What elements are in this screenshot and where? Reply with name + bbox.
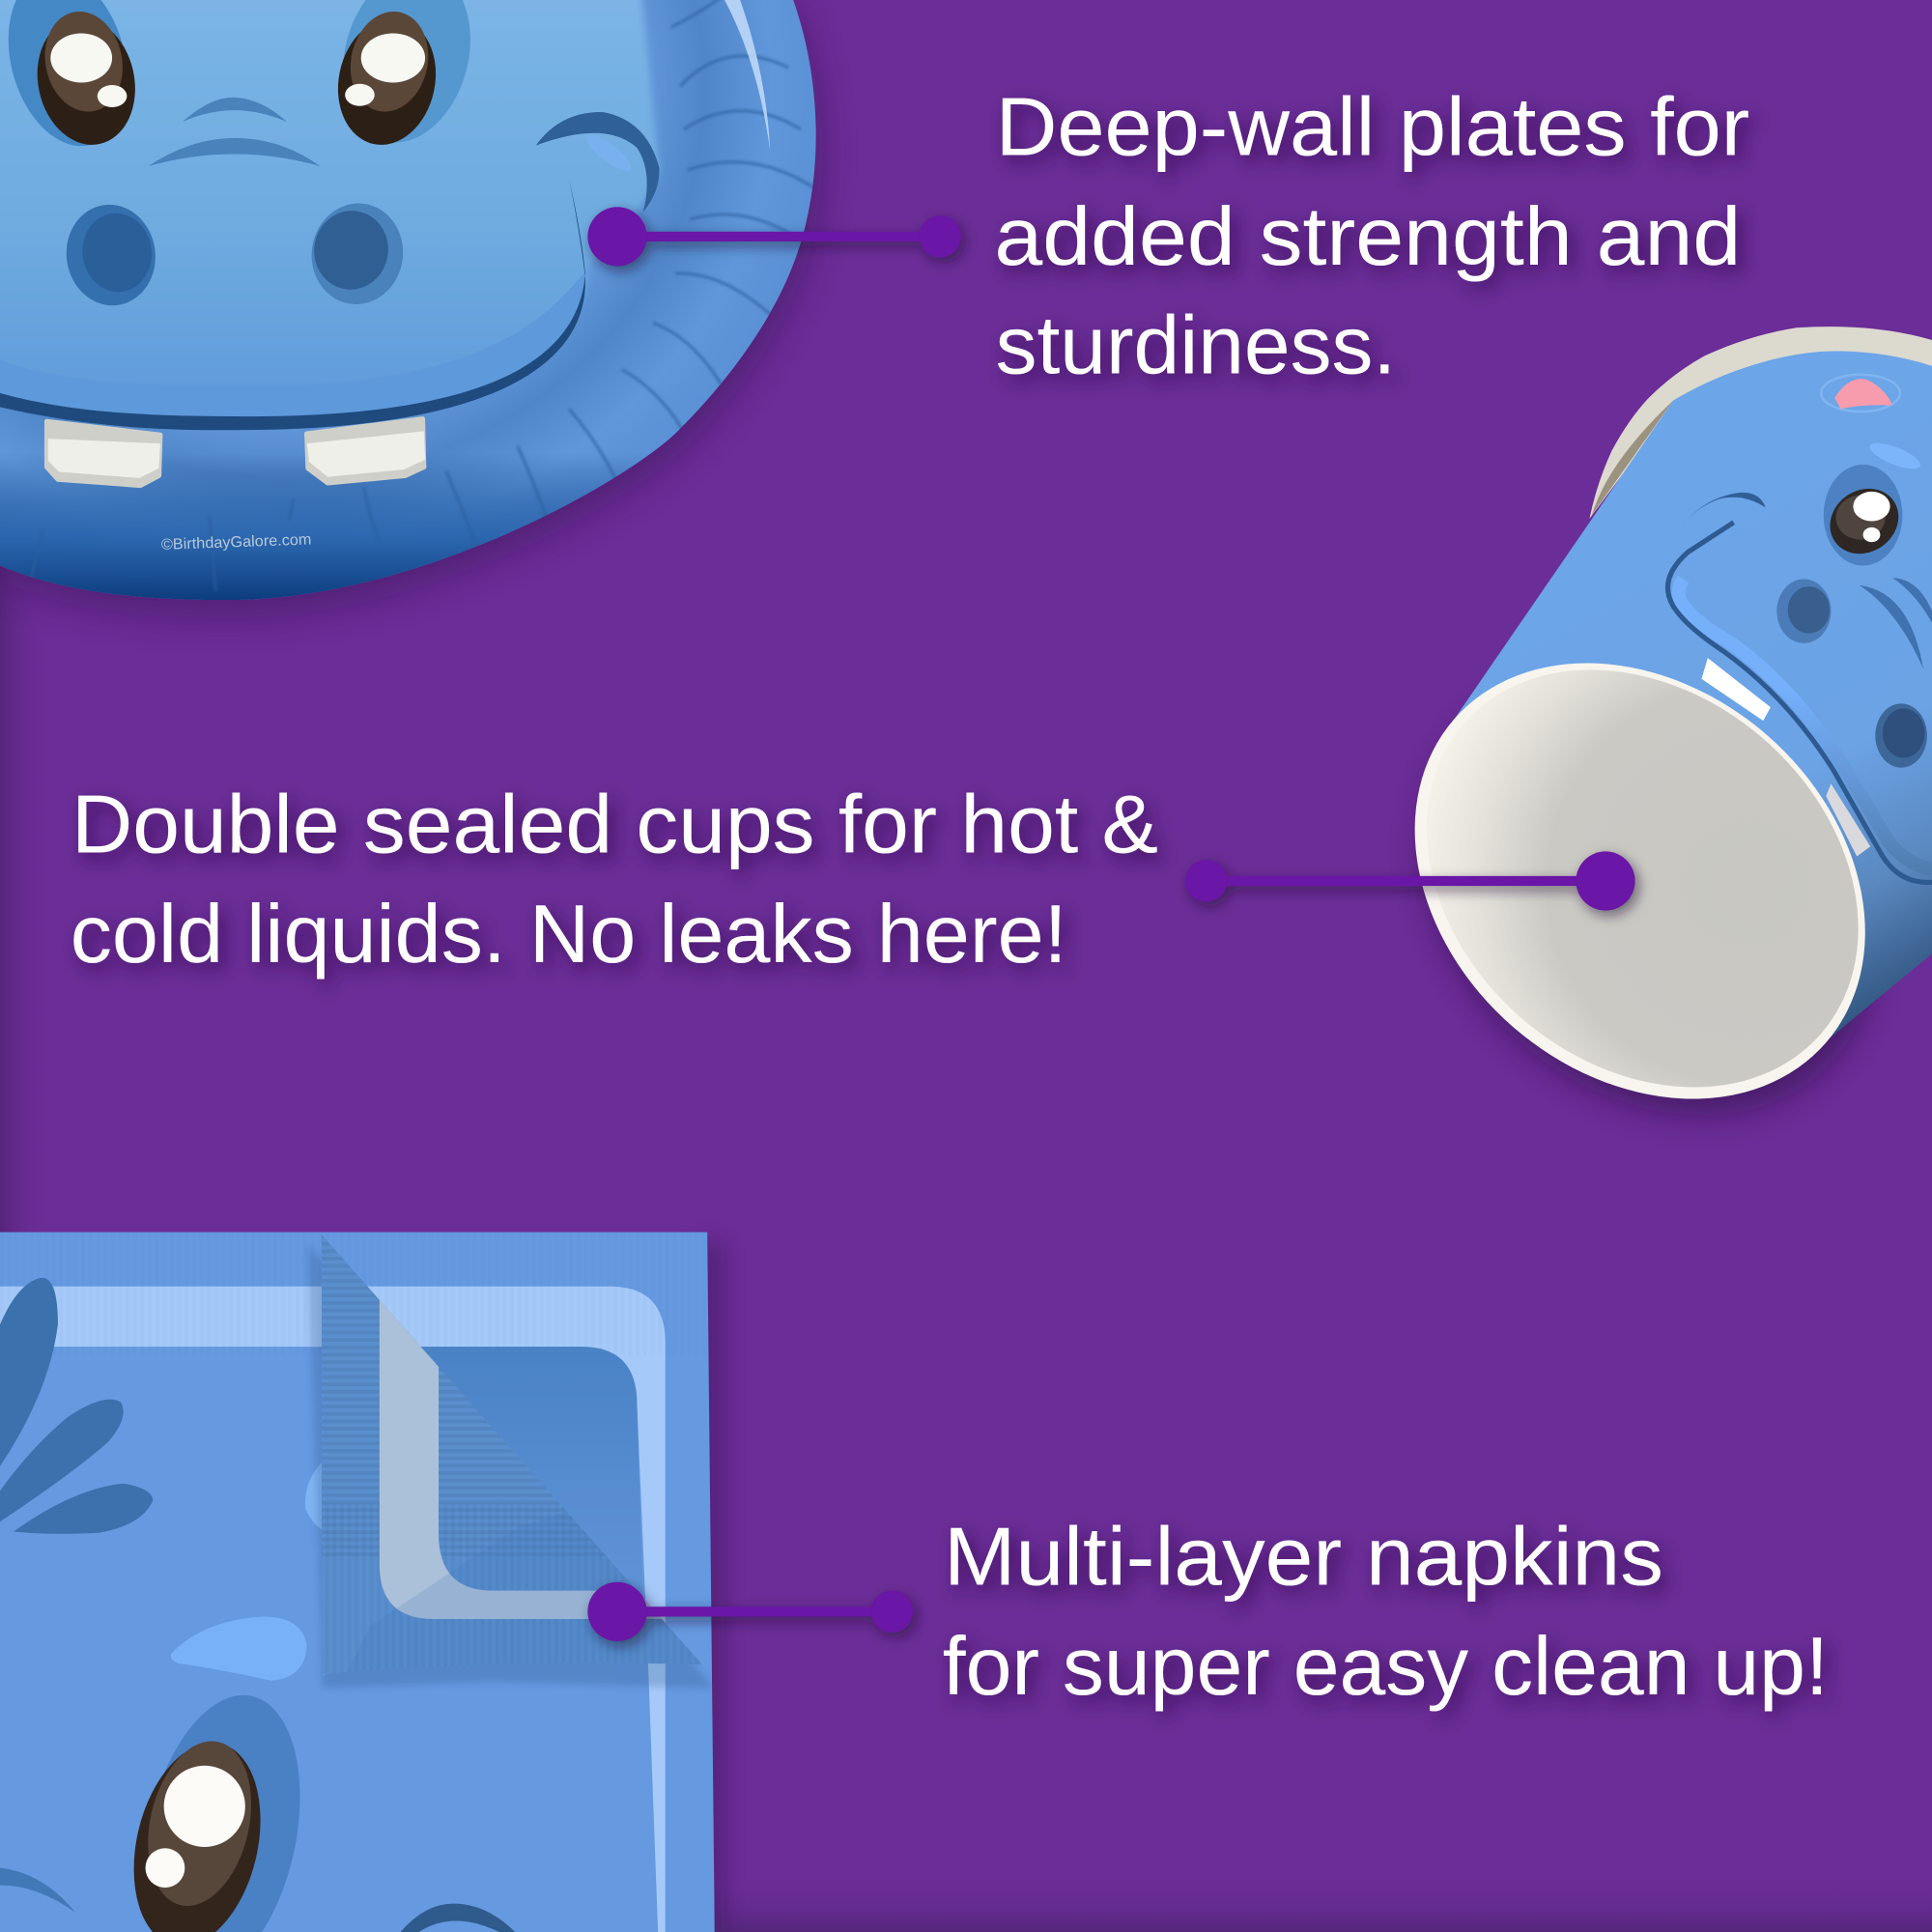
left eye (8, 0, 135, 147)
cup face (1667, 375, 1932, 882)
cup lip band (1679, 579, 1932, 870)
nose (1821, 375, 1900, 412)
teeth (46, 421, 160, 486)
cup rim (1589, 327, 1932, 519)
plate shadow (6, 5, 822, 617)
panel: hippo plate (0, 0, 850, 617)
rim highlight (724, 0, 770, 151)
muzzle (0, 0, 659, 423)
nose hint (305, 1463, 322, 1529)
text: cups: Double sealed cups for hot & (71, 780, 1158, 871)
ear line (536, 112, 659, 212)
inner shade (421, 1347, 642, 1590)
napkin fold (308, 1233, 715, 1688)
napkin brows (0, 1868, 75, 1913)
napkin sheet (0, 1233, 727, 1932)
napkin shadow (697, 1242, 724, 1932)
text: cups (71, 780, 1158, 980)
light blob (171, 1616, 307, 1681)
text: plates: sturdiness. (996, 299, 1396, 391)
text: plates: added strength and (994, 191, 1741, 283)
cup base inner (1343, 583, 1932, 1174)
panel: paper cup (1410, 327, 1932, 1128)
plate rim (0, 0, 850, 616)
callout: cup pointer (1185, 851, 1635, 911)
border stripe (0, 1287, 666, 1932)
mouth line (0, 180, 585, 430)
nostrils (66, 203, 404, 305)
cup mouth (1667, 523, 1932, 882)
flap stripe (380, 1282, 666, 1619)
cup eye (1824, 442, 1920, 566)
cup base (1327, 573, 1932, 1188)
callout: plate pointer (587, 207, 961, 267)
cup teeth (1701, 658, 1771, 721)
watermark: ©BirthdayGalore.com (161, 531, 312, 554)
text: plates (994, 82, 1749, 391)
panel: napkin (0, 1233, 727, 1932)
rim wrinkles (27, 0, 813, 591)
cup nostrils (1776, 579, 1927, 768)
cup brows (1860, 578, 1932, 669)
leaves (0, 1278, 153, 1534)
text: napkins: for super easy clean up! (943, 1621, 1829, 1713)
callout: napkin pointer (587, 1582, 913, 1641)
text: cups: cold liquids. No leaks here! (71, 889, 1067, 980)
cheek highlight (587, 135, 631, 171)
cup ear (1688, 493, 1766, 520)
brows (148, 98, 321, 166)
cup body (1452, 352, 1932, 1047)
right eye (338, 0, 470, 145)
text: napkins: Multi-layer napkins (944, 1511, 1663, 1603)
napkin eye (133, 1695, 299, 1932)
text: napkins (943, 1511, 1829, 1713)
cup shadow (1336, 589, 1932, 1205)
text: plates: Deep-wall plates for (996, 82, 1749, 174)
